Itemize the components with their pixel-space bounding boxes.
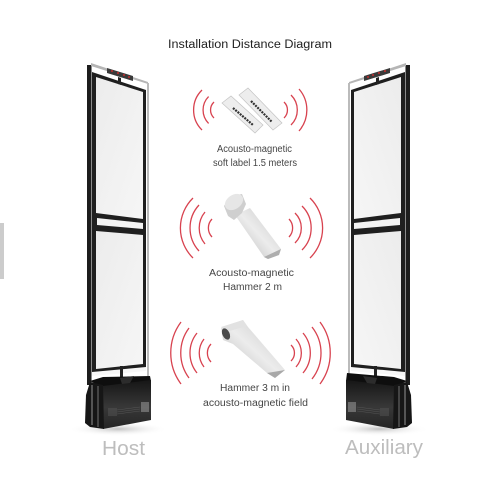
icon: large hammer tag [220, 320, 285, 378]
signal waves: hammer 2 m right [289, 198, 323, 258]
auxiliary base [346, 373, 412, 429]
host label: Host [102, 438, 145, 460]
soft label caption: soft label 1.5 meters [213, 158, 297, 169]
signal waves: soft label right [284, 89, 307, 131]
hammer 3 m caption: acousto-magnetic field [203, 398, 308, 409]
hammer 3 m caption: Hammer 3 m in [220, 383, 290, 394]
hammer 2 m caption: Hammer 2 m [223, 282, 282, 293]
auxiliary gate [329, 63, 429, 436]
icon: soft labels [222, 88, 282, 133]
hammer 2 m caption [209, 268, 294, 293]
signal waves: hammer 3 m left [171, 322, 211, 384]
soft label caption: Acousto-magnetic [217, 144, 292, 155]
signal waves: hammer 2 m left [180, 198, 212, 258]
host gate [68, 63, 168, 436]
hammer 3 m caption [203, 383, 308, 409]
icon: hammer tag [222, 191, 281, 259]
soft label caption [213, 144, 297, 169]
signal waves: hammer 3 m right [291, 322, 330, 384]
auxiliary label: Auxiliary [345, 437, 423, 459]
host base [85, 376, 151, 429]
edge tab [0, 223, 4, 279]
title: Installation Distance Diagram [168, 39, 332, 51]
hammer 2 m caption: Acousto-magnetic [209, 268, 294, 279]
signal waves: soft label left [194, 90, 214, 130]
